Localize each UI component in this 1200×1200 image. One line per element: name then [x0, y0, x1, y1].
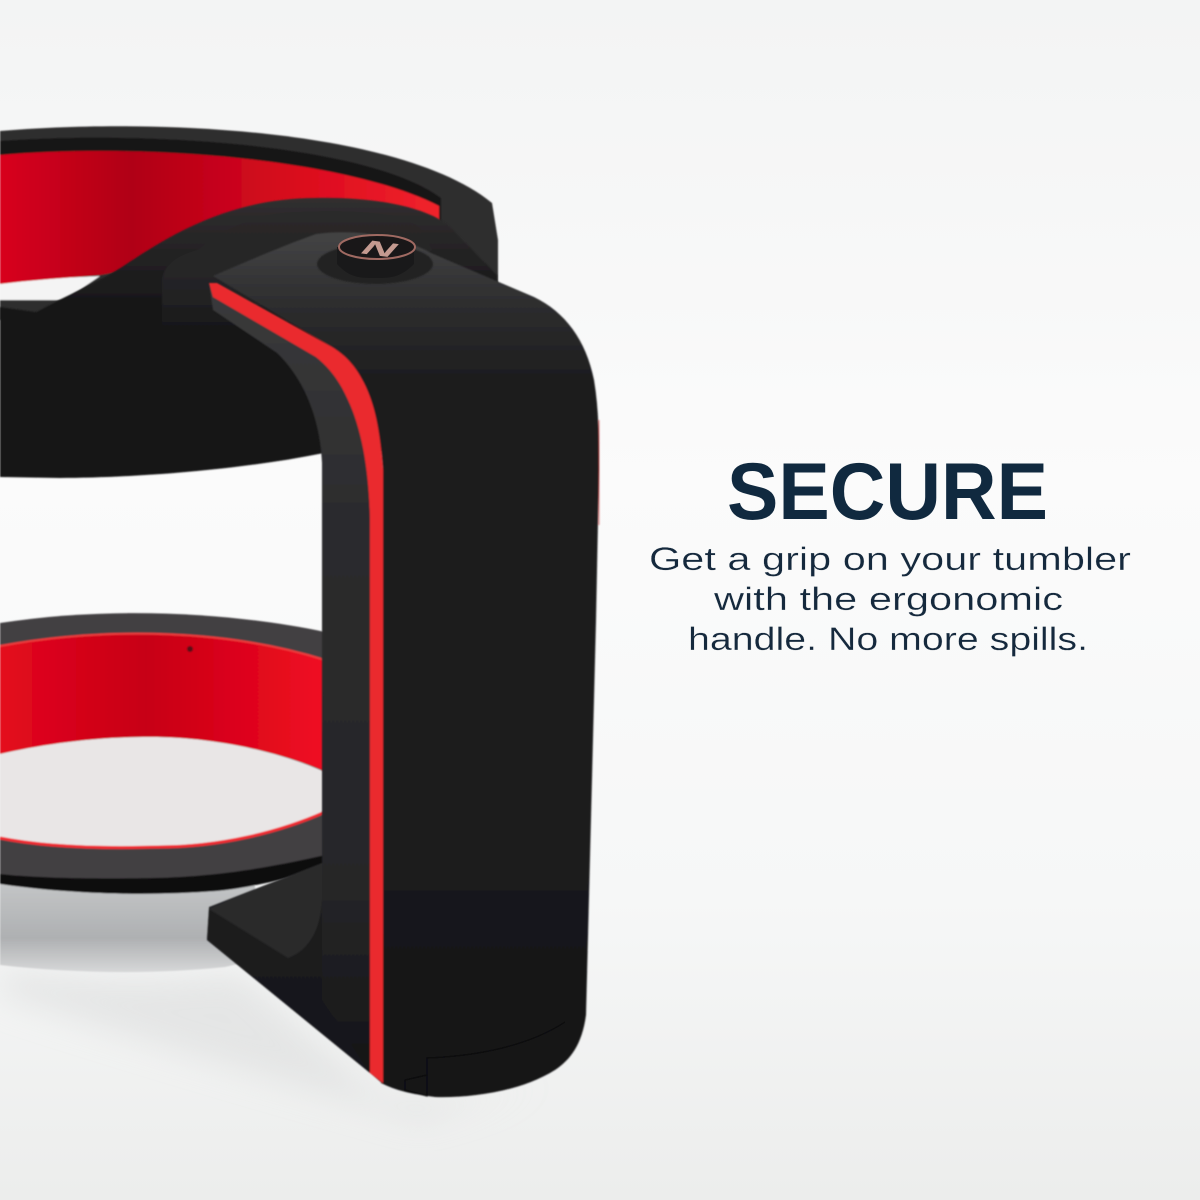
- black band: [0, 198, 497, 478]
- red stripe: [209, 283, 383, 1083]
- red edge on right of grip: [598, 420, 600, 525]
- handle grip body: [213, 232, 599, 1097]
- button body: [337, 247, 414, 278]
- button recess: [317, 244, 433, 284]
- lower ring red interior: [0, 634, 325, 815]
- description: [649, 541, 1131, 657]
- heading: SECURE: [727, 447, 1048, 537]
- logo button: [317, 235, 433, 284]
- collar: [162, 211, 432, 372]
- lower ring dark rim: [0, 613, 325, 878]
- handle base front face: [207, 900, 370, 1073]
- lower ring red upper lip: [0, 634, 325, 660]
- top ring: [0, 126, 498, 320]
- handle base upper face: [209, 863, 322, 958]
- top ring rim: [0, 126, 498, 320]
- top ring inner ledge: [0, 138, 441, 222]
- handle: [207, 232, 599, 1097]
- white opening under red: [0, 276, 100, 300]
- logo letter: N: [354, 236, 405, 261]
- lower ring: [0, 613, 330, 972]
- line 3: handle. No more spills.: [688, 621, 1088, 657]
- upper band and collar: [0, 198, 497, 478]
- top ring red interior: [0, 151, 439, 284]
- button face: [339, 235, 415, 259]
- line 1: Get a grip on your tumbler: [649, 541, 1131, 577]
- handle inner face and base: [207, 283, 383, 1084]
- gray cup: [0, 875, 255, 972]
- thin red lip: [0, 812, 325, 848]
- lower ring opening: [0, 737, 325, 848]
- lower ring black underside: [0, 850, 330, 894]
- floor shadow: [0, 968, 560, 1120]
- line 2: with the ergonomic: [713, 581, 1063, 617]
- small mark on red: [187, 646, 193, 652]
- seam at grip foot: [405, 1010, 576, 1096]
